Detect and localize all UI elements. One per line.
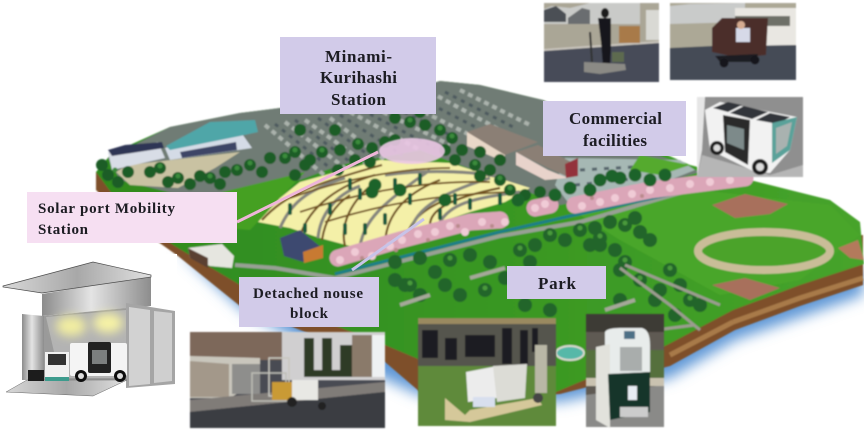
label: Commercial facilities: Commercial	[569, 109, 662, 128]
photo: street battery unit	[586, 314, 664, 428]
illustration: solar port mobility station	[0, 254, 177, 401]
label: Minami-Kurihashi Station: Station	[331, 90, 387, 109]
label: Minami-Kurihashi Station	[280, 37, 436, 114]
pink pointer line	[237, 152, 378, 222]
photo: detached house cart	[190, 332, 385, 428]
charger unit	[45, 352, 69, 380]
tree clusters	[102, 112, 700, 315]
town area	[108, 81, 700, 205]
map ground	[96, 81, 864, 392]
running track	[698, 232, 830, 270]
conifers on lots	[290, 175, 500, 234]
station roof	[3, 262, 151, 293]
side field	[838, 240, 864, 260]
photo: park power cart	[418, 318, 556, 426]
pink station marker	[379, 138, 445, 164]
lot roads	[262, 165, 500, 246]
batteries	[28, 370, 44, 381]
road	[235, 182, 740, 278]
station left door	[22, 314, 44, 380]
photo: solar vehicle render	[697, 97, 803, 177]
label: Commercial facilities: facilities	[583, 131, 647, 150]
yellow housing lots	[258, 160, 530, 246]
station floor	[6, 380, 127, 396]
label: Detached house block	[239, 277, 379, 327]
isometric town map	[96, 81, 864, 398]
station interior	[43, 308, 127, 380]
map shadow on water	[178, 250, 863, 402]
school yard	[116, 152, 240, 188]
label: Commercial facilities	[543, 101, 686, 156]
baseball diamond lower	[712, 278, 780, 300]
vehicle body	[705, 102, 797, 173]
label: Solar port Mobility Station: Solar port Mobility	[38, 201, 176, 217]
photo: seated mobility vehicle	[670, 3, 796, 80]
station back wall	[42, 276, 151, 316]
canal	[335, 188, 700, 274]
label: Detached house block: block	[290, 306, 329, 322]
lilac pointer line	[352, 219, 424, 270]
station right door	[126, 303, 175, 388]
label: Park: Park	[538, 274, 577, 293]
park paths	[620, 265, 720, 332]
label: Solar port Mobility Station: Station	[38, 222, 89, 238]
pond	[556, 346, 584, 360]
label: Solar port Mobility Station	[27, 192, 237, 243]
label: Detached house block: Detached nouse	[253, 286, 363, 302]
label: Park	[507, 266, 606, 299]
parking lot	[555, 158, 695, 205]
map soil edge	[96, 172, 863, 398]
label: Minami-Kurihashi Station: Minami-	[325, 47, 392, 66]
green lawn	[190, 172, 305, 230]
commercial buildings	[467, 124, 578, 180]
town house texture	[265, 90, 530, 180]
park lawn	[580, 190, 860, 295]
baseball diamond	[712, 194, 788, 218]
label: Minami-Kurihashi Station: Kurihashi	[320, 68, 397, 87]
solar mobility vehicle	[70, 343, 127, 376]
housing block buildings	[188, 230, 323, 268]
ceiling lights	[56, 316, 86, 336]
school building	[108, 120, 258, 170]
cherry blossom row	[338, 178, 745, 258]
photo: standing mobility scooter	[544, 3, 659, 82]
